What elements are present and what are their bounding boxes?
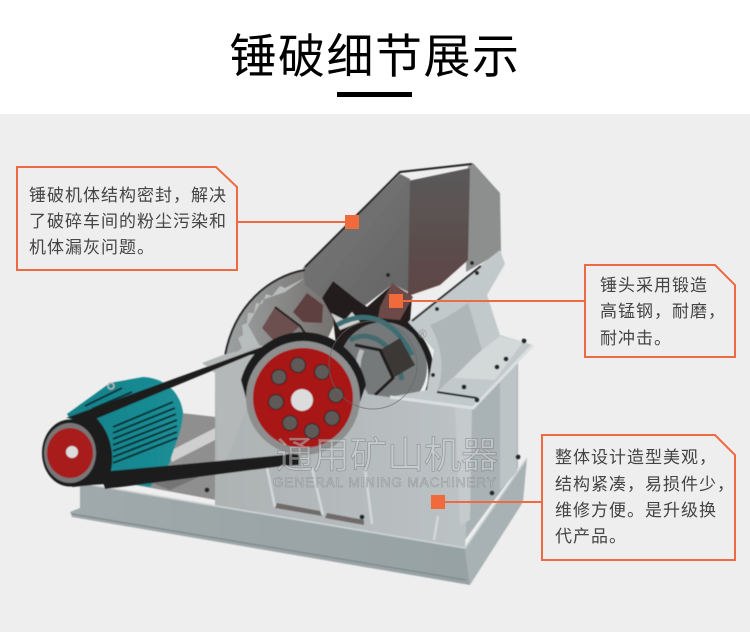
callout box 1 xyxy=(17,167,237,270)
watermark chinese name: 通用矿山机器 xyxy=(276,435,498,476)
body base pockets xyxy=(275,503,364,525)
callout text 3: 结构紧凑，易损件少， xyxy=(555,475,735,494)
housing step xyxy=(453,336,523,380)
marker 2 xyxy=(389,294,403,308)
drum outline xyxy=(225,270,305,356)
base right face xyxy=(465,458,527,585)
small pulley xyxy=(42,420,98,486)
registered mark: ® xyxy=(418,327,427,341)
callout: hammer head xyxy=(389,265,735,357)
machine body front xyxy=(215,372,472,548)
body ribs xyxy=(267,468,438,540)
callout text 3: 代产品。 xyxy=(555,527,627,546)
callout box 2 xyxy=(585,265,735,357)
base top rim line xyxy=(80,458,527,548)
title underline xyxy=(337,92,412,97)
flange dark line xyxy=(412,266,481,321)
callout text 1: 锤破机体结构密封，解决 xyxy=(29,186,227,205)
leader line 1 xyxy=(237,221,347,223)
left pedestal xyxy=(202,345,262,480)
hopper side wall xyxy=(303,174,410,307)
rotor xyxy=(337,317,431,412)
serrated drum liner xyxy=(232,278,305,356)
callout text 1: 了破碎车间的粉尘污染和 xyxy=(29,212,227,231)
side column rib xyxy=(500,362,517,490)
motor cooling fins xyxy=(85,388,177,463)
header band xyxy=(0,0,750,114)
bearing housing xyxy=(390,250,533,408)
machine body side xyxy=(465,363,518,540)
bolts xyxy=(205,261,526,519)
pulley hub xyxy=(291,389,313,411)
callout: sealed structure xyxy=(17,167,359,270)
housing arch shade xyxy=(430,303,482,392)
pulley holes xyxy=(268,358,344,438)
watermark xyxy=(273,321,498,490)
housing base dark line xyxy=(437,392,477,398)
hammer heads xyxy=(262,283,413,340)
large pulley xyxy=(246,341,360,455)
motor belt wrap xyxy=(72,415,112,487)
belts xyxy=(66,332,366,489)
callout text 3: 维修方便。是升级换 xyxy=(555,501,717,520)
rotor chamber dark area xyxy=(322,281,425,380)
base front rim xyxy=(70,483,470,585)
callout text 2: 耐冲击。 xyxy=(600,329,672,348)
motor mount xyxy=(130,412,216,500)
callout text 2: 高锰钢，耐磨， xyxy=(600,302,726,321)
drum housing xyxy=(225,270,345,400)
marker 3 xyxy=(431,495,445,509)
callout box 3 xyxy=(542,435,735,560)
callout: overall design xyxy=(431,435,735,560)
hopper interior back panel xyxy=(408,168,470,296)
leader line 2 xyxy=(400,300,585,302)
watermark logo ring xyxy=(329,321,417,409)
flange plate xyxy=(390,345,533,408)
hopper outer right wall xyxy=(466,163,501,272)
callout text 2: 锤头采用锻造 xyxy=(600,276,708,295)
base lip shadow xyxy=(72,514,466,580)
leader line 3 xyxy=(443,501,542,503)
hopper top edge xyxy=(305,164,472,267)
body corner column xyxy=(455,406,472,525)
callout text 3: 整体设计造型美观， xyxy=(555,448,717,467)
title: 锤破细节展示 xyxy=(230,30,520,83)
marker 1 xyxy=(345,215,359,229)
watermark english name: GENERAL MINING MACHINERY xyxy=(273,475,497,490)
electric motor xyxy=(67,377,183,487)
callout text 1: 机体漏灰问题。 xyxy=(29,238,155,257)
hammer crusher machine xyxy=(42,163,533,585)
base plate xyxy=(70,458,527,585)
lifting eye xyxy=(108,383,114,389)
